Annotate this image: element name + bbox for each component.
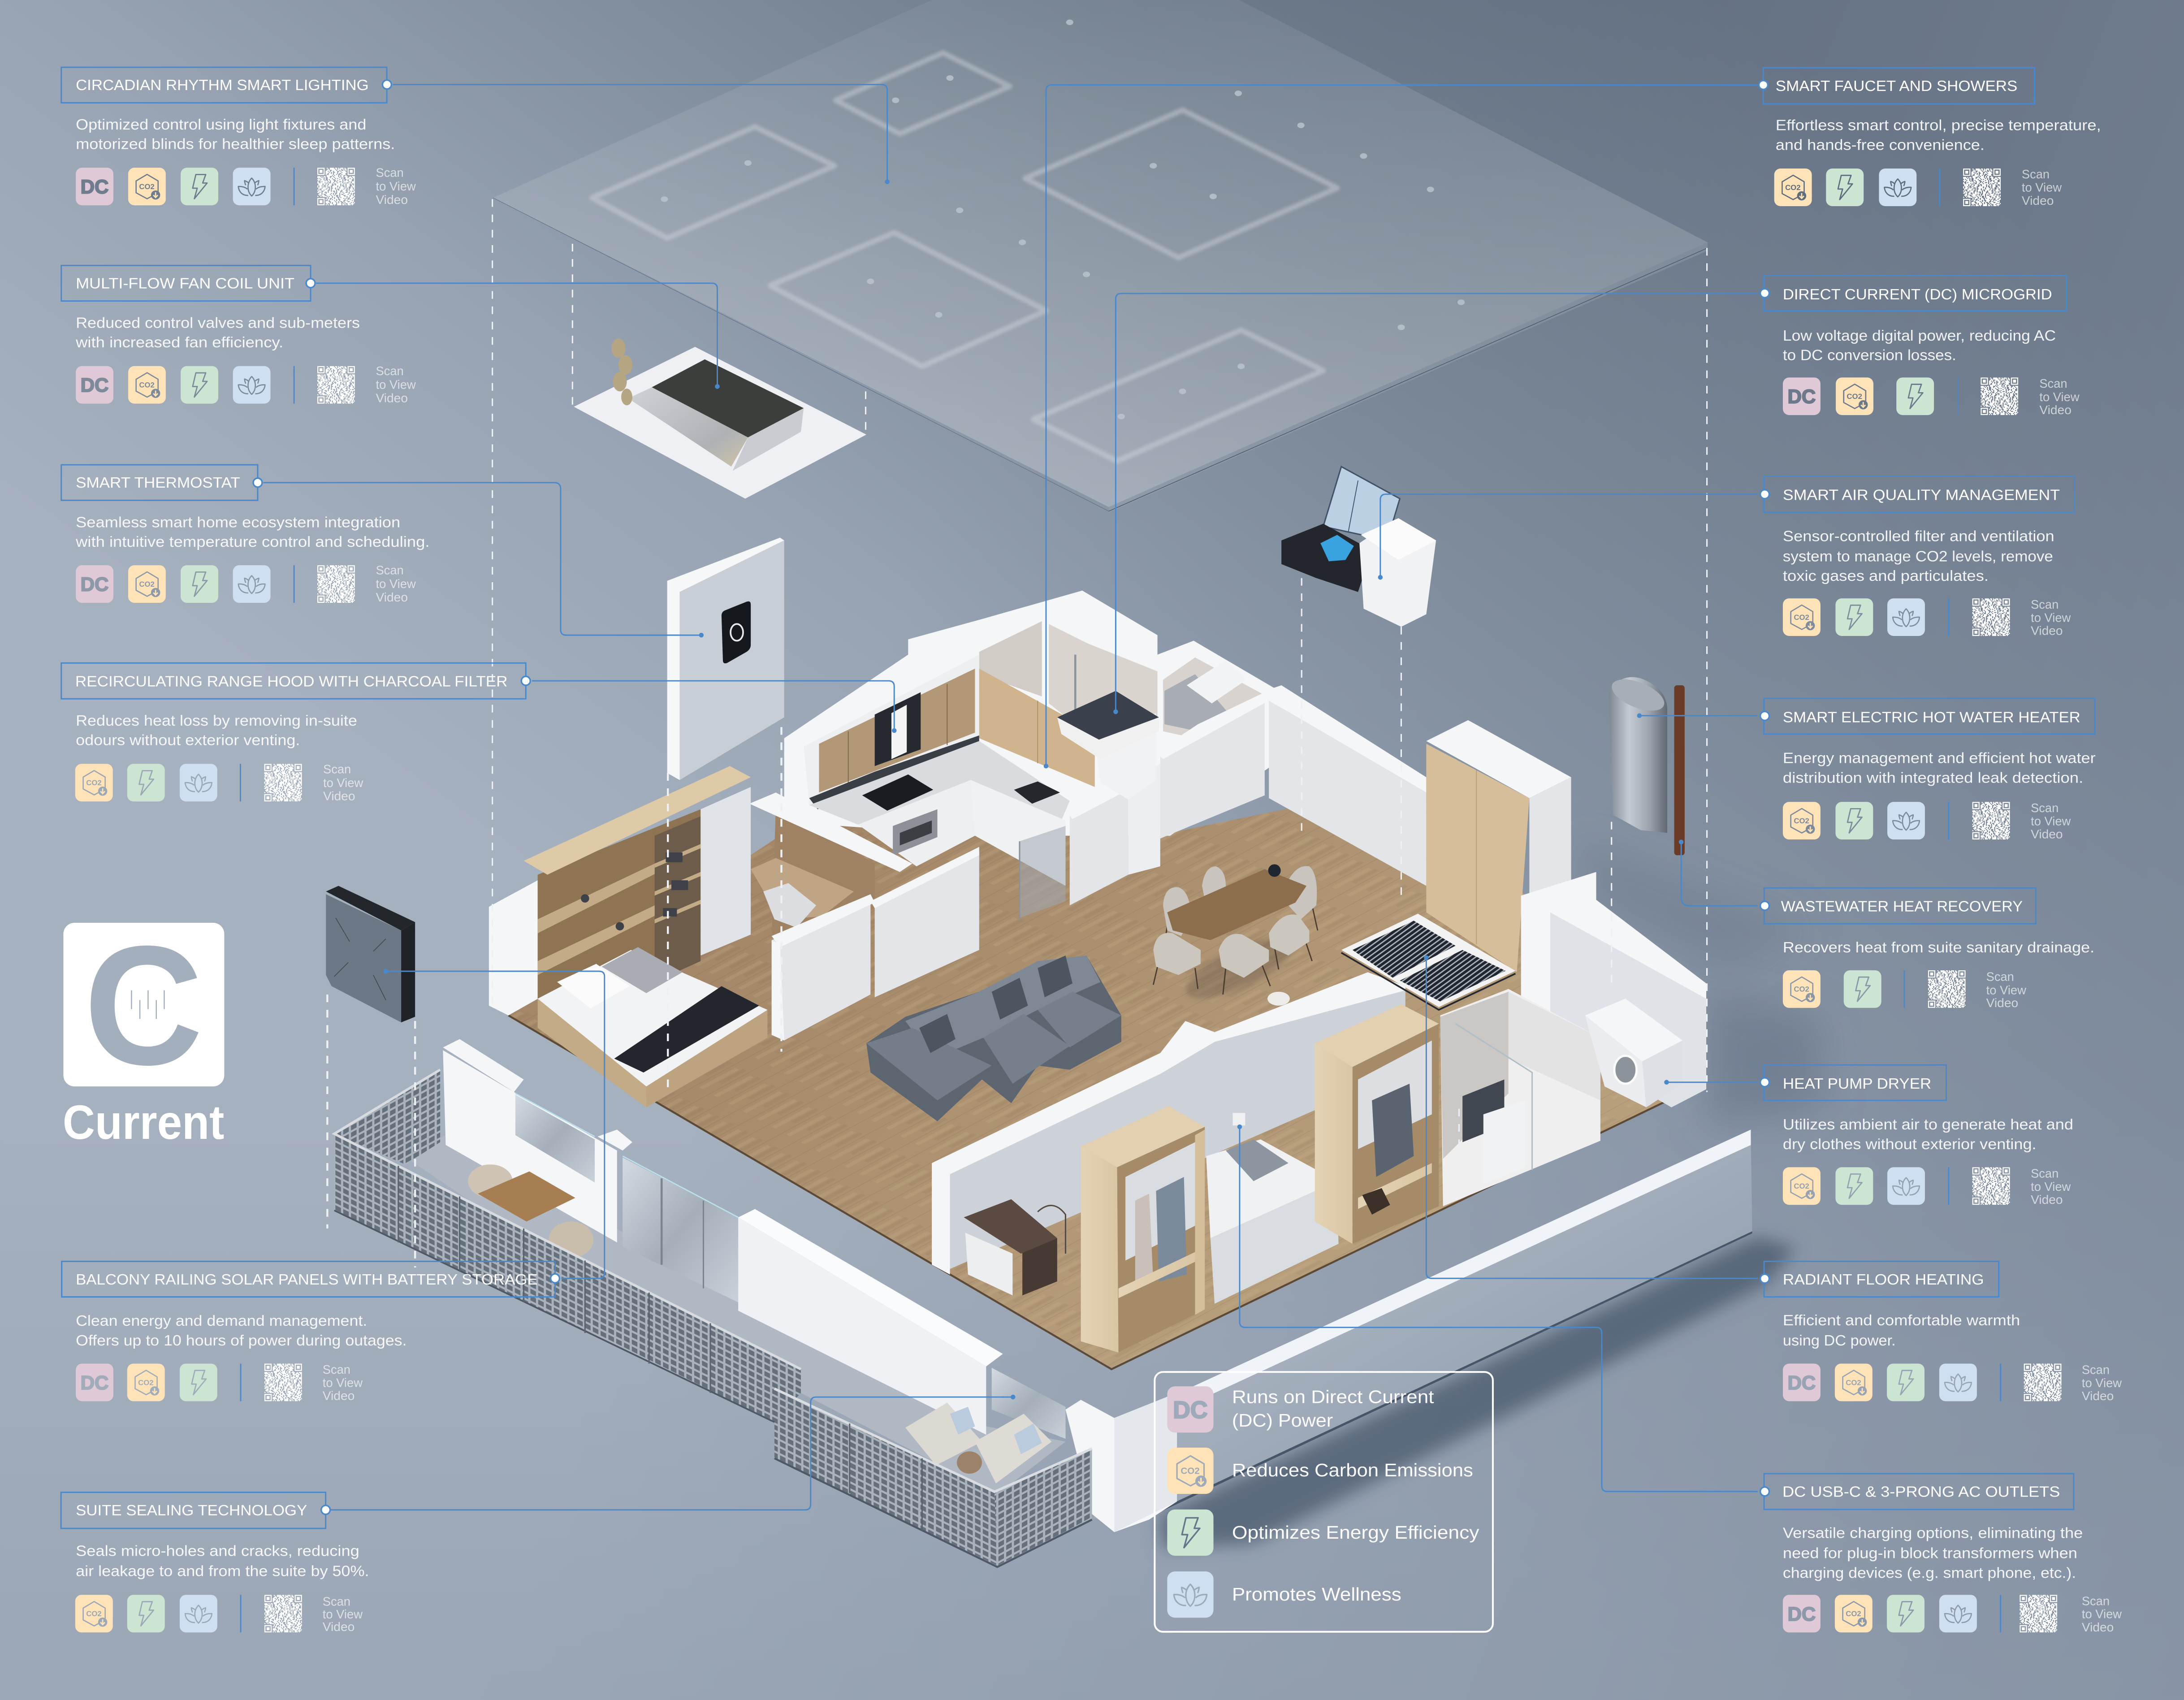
- QR code: [241, 1363, 302, 1401]
- scan label: Scan: [323, 1363, 350, 1376]
- legend: direct current: DC: [1173, 1397, 1208, 1423]
- callout: recirculating range hood: [61, 663, 530, 803]
- scan label: to View: [323, 1607, 363, 1621]
- scan label: to View: [376, 378, 416, 392]
- heading: [1759, 68, 2035, 104]
- benefit icons: CO2: [1846, 1609, 1861, 1618]
- QR code: [294, 168, 355, 205]
- scan label: Scan: [1986, 969, 2014, 983]
- tall wardrobe: [1426, 720, 1571, 972]
- headboard closet with shelves: [524, 766, 751, 1024]
- lighting rings: [592, 53, 1337, 461]
- logo tile: C: [84, 911, 203, 1101]
- description: with increased fan efficiency.: [75, 334, 283, 350]
- heading: SMART THERMOSTAT: [76, 475, 240, 491]
- heading: RECIRCULATING RANGE HOOD WITH CHARCOAL FILTER: [75, 673, 507, 690]
- description: [76, 116, 395, 152]
- benefit icons: CO2: [1794, 613, 1809, 622]
- scan label: [2031, 597, 2071, 638]
- scan label: Scan: [2031, 801, 2059, 815]
- callout: radiant floor heating: [1760, 1261, 2122, 1403]
- benefit icons: CO2: [1785, 183, 1801, 192]
- heat pump dryer: [1585, 999, 1682, 1107]
- description: [1783, 528, 2054, 584]
- east walls: [1521, 872, 1706, 1107]
- QR code: [1904, 970, 1966, 1008]
- heading: HEAT PUMP DRYER: [1783, 1076, 1931, 1092]
- scan label: Scan: [2031, 597, 2059, 611]
- heading: [62, 1261, 559, 1297]
- description: [1783, 1116, 2073, 1152]
- callout: smart faucet and showers: [1759, 68, 2101, 208]
- bed in second bedroom: [1206, 1139, 1339, 1304]
- heading: DC USB-C & 3-PRONG AC OUTLETS: [1782, 1484, 2060, 1501]
- description: [76, 1542, 369, 1579]
- scan label: Video: [323, 789, 355, 803]
- benefit icons: CO2: [139, 580, 155, 588]
- hallway glass door: [1020, 826, 1065, 919]
- callout: wastewater heat recovery: [1760, 888, 2094, 1010]
- benefit icons: CO2: [1794, 1182, 1809, 1190]
- heading: [1760, 888, 2036, 924]
- south wall: [932, 972, 1406, 1275]
- QR code: [2001, 1595, 2057, 1632]
- benefit icons: CO2: [138, 1378, 154, 1387]
- QR code: [1949, 802, 2010, 839]
- left wall stub: [489, 880, 541, 1016]
- callout: smart thermostat: [61, 465, 429, 604]
- scan label: Scan: [323, 762, 351, 776]
- description: Versatile charging options, eliminating the: [1783, 1525, 2083, 1541]
- description: system to manage CO2 levels, remove: [1783, 548, 2053, 564]
- heading: CIRCADIAN RHYTHM SMART LIGHTING: [76, 77, 369, 94]
- description: Recovers heat from suite sanitary drainage.: [1783, 939, 2094, 956]
- desk: [964, 1199, 1065, 1295]
- scan label: Video: [2082, 1620, 2114, 1634]
- scan label: Video: [323, 1389, 355, 1402]
- scan label: [1986, 969, 2026, 1010]
- radiant floor heating panel: [1341, 914, 1515, 1010]
- benefit icons: CO2: [1794, 985, 1809, 994]
- end wall block: [1065, 1393, 1177, 1532]
- outlet plate: [1233, 1113, 1245, 1125]
- scan label: Scan: [2039, 376, 2067, 390]
- balcony wall with window: [443, 1039, 738, 1302]
- scan label: [2082, 1363, 2122, 1403]
- benefit icons: CO2: [86, 779, 102, 787]
- scan label: [2031, 1166, 2071, 1207]
- QR code: [1958, 377, 2018, 415]
- heading: SUITE SEALING TECHNOLOGY: [76, 1502, 307, 1519]
- description: Clean energy and demand management.: [76, 1312, 367, 1329]
- description: charging devices (e.g. smart phone, etc.).: [1783, 1564, 2076, 1581]
- QR code: [1940, 169, 2001, 206]
- solar railing panels: [334, 1070, 1092, 1567]
- scan label: to View: [2022, 181, 2062, 195]
- icon: smart thermostat: [722, 601, 751, 663]
- scan label: [2082, 1594, 2122, 1634]
- benefit icons: CO2: [139, 381, 155, 389]
- QR code: [294, 366, 355, 404]
- benefit icons: CO2: [86, 1609, 102, 1618]
- description: using DC power.: [1783, 1332, 1896, 1349]
- floor slab and strip: [1094, 1129, 1752, 1523]
- thermostat wall panel: [667, 538, 784, 780]
- scan label: to View: [323, 776, 363, 790]
- heading: DIRECT CURRENT (DC) MICROGRID: [1783, 286, 2052, 303]
- benefit icons: DC: [1787, 1372, 1816, 1394]
- scan label: Scan: [2082, 1594, 2110, 1608]
- heading: [61, 265, 315, 301]
- benefit icons: [1783, 598, 1925, 636]
- scan label: to View: [2039, 390, 2080, 404]
- smart air quality unit: [1281, 467, 1436, 627]
- closet 1: [1081, 1106, 1205, 1353]
- scan label: [323, 1594, 363, 1634]
- description: air leakage to and from the suite by 50%.: [76, 1562, 369, 1579]
- callout: smart electric hot water heater: [1760, 698, 2096, 841]
- scan label: to View: [323, 1376, 363, 1389]
- description: Seamless smart home ecosystem integration: [76, 514, 400, 530]
- closet 2: [1315, 1004, 1439, 1244]
- scan label: Scan: [2031, 1166, 2059, 1180]
- description: toxic gases and particulates.: [1783, 567, 1989, 584]
- description: dry clothes without exterior venting.: [1783, 1136, 2037, 1152]
- scan label: Scan: [2082, 1363, 2110, 1376]
- scan label: Video: [376, 590, 408, 604]
- benefit icons: CO2: [1794, 817, 1809, 825]
- scan label: to View: [2082, 1376, 2122, 1390]
- scan label: [2022, 167, 2062, 208]
- ceiling duct vent: [1057, 691, 1159, 759]
- scan label: Video: [2031, 827, 2063, 841]
- scan label: Scan: [376, 166, 404, 180]
- long balcony wall: [738, 1209, 1065, 1439]
- benefit icons: DC: [1787, 1604, 1816, 1625]
- scan label: to View: [1986, 983, 2026, 997]
- suite model: [334, 538, 1752, 1567]
- description: motorized blinds for healthier sleep patterns.: [76, 136, 395, 152]
- balcony: [334, 1039, 1177, 1567]
- legend frame: [1155, 1372, 1493, 1632]
- connector lines: [263, 85, 1758, 1510]
- legend: carbon: CO2: [1181, 1466, 1200, 1476]
- heading: [1760, 276, 2067, 311]
- kitchen counter and base cabinets: [809, 735, 1070, 886]
- QR code: [1949, 1167, 2010, 1205]
- scan label: [2031, 801, 2071, 841]
- benefit icons: [75, 1595, 217, 1632]
- legend: direct current: [1167, 1386, 1434, 1432]
- legend: wellness: Promotes Wellness: [1232, 1584, 1401, 1605]
- description: need for plug-in block transformers when: [1783, 1544, 2077, 1561]
- benefit icons: DC: [81, 1372, 108, 1394]
- description: Efficient and comfortable warmth: [1783, 1312, 2020, 1328]
- legend: energy: Optimizes Energy Efficiency: [1232, 1522, 1479, 1543]
- scan label: Video: [376, 391, 408, 405]
- bed: [538, 947, 767, 1107]
- sofa: [866, 956, 1121, 1121]
- heading: WASTEWATER HEAT RECOVERY: [1781, 898, 2023, 915]
- callout: direct current microgrid: [1760, 276, 2080, 417]
- kitchen wall and cabinets: [804, 655, 1095, 805]
- callout: smart air quality management: [1760, 476, 2074, 638]
- heading: MULTI-FLOW FAN COIL UNIT: [76, 275, 294, 292]
- benefit icons: DC: [81, 375, 108, 396]
- description: [76, 1312, 407, 1349]
- legend: carbon: Reduces Carbon Emissions: [1232, 1460, 1473, 1480]
- scan label: to View: [2031, 611, 2071, 625]
- interior partition walls: [772, 685, 1426, 1040]
- heading: [1760, 476, 2074, 512]
- QR code: [240, 764, 302, 801]
- description: [1783, 327, 2056, 363]
- heading: [1760, 1065, 1946, 1100]
- scan label: Video: [1986, 996, 2018, 1010]
- back wall silhouette: [784, 591, 1281, 836]
- benefit icons: DC: [81, 177, 108, 198]
- heading: SMART AIR QUALITY MANAGEMENT: [1783, 487, 2060, 504]
- scan label: Video: [2082, 1389, 2114, 1403]
- dashed projection lines: [327, 199, 1707, 1267]
- benefit icons: DC: [81, 574, 108, 596]
- description: Effortless smart control, precise temperature,: [1776, 117, 2101, 134]
- scan label: to View: [2031, 814, 2071, 828]
- multi-flow fan coil unit: [574, 338, 866, 499]
- heading: [1760, 1261, 1999, 1297]
- bathroom: [1440, 989, 1600, 1206]
- description: [75, 315, 360, 350]
- scan label: Video: [2022, 194, 2054, 208]
- callout: multi-flow fan coil unit: [61, 265, 416, 405]
- bathroom rooms at rear: [979, 621, 1262, 745]
- scan label: [376, 364, 416, 405]
- scan label: Video: [2039, 403, 2072, 417]
- description: [1783, 1312, 2020, 1349]
- benefit icons: [75, 764, 217, 801]
- description: distribution with integrated leak detection.: [1783, 770, 2083, 786]
- benefit icons: [1783, 1595, 1977, 1632]
- description: Reduces heat loss by removing in-suite: [76, 712, 357, 729]
- logo: Current: [63, 911, 224, 1149]
- balcony table and chairs: [468, 1164, 1051, 1484]
- scan label: [376, 563, 416, 604]
- heading: SMART ELECTRIC HOT WATER HEATER: [1783, 709, 2080, 726]
- scan label: Video: [2031, 1193, 2063, 1207]
- benefit icons: [76, 565, 271, 603]
- description: Energy management and efficient hot water: [1783, 749, 2096, 766]
- scan label: Scan: [2022, 167, 2050, 181]
- heading: [1760, 1474, 2074, 1510]
- description: Sensor-controlled filter and ventilation: [1783, 528, 2054, 545]
- heading: SMART FAUCET AND SHOWERS: [1776, 78, 2017, 95]
- description: [75, 514, 429, 550]
- dining table and chairs: [1153, 864, 1318, 1010]
- benefit icons: DC: [1787, 386, 1816, 408]
- description: odours without exterior venting.: [76, 731, 300, 748]
- scan label: Scan: [376, 563, 404, 577]
- legend: energy: [1167, 1510, 1479, 1556]
- scan label: [323, 1363, 363, 1402]
- energy recovery wall panel: [326, 886, 415, 1022]
- legend: direct current: (DC) Power: [1232, 1410, 1333, 1431]
- scan label: to View: [2082, 1607, 2122, 1621]
- description: [76, 712, 357, 748]
- QR code: [1949, 598, 2010, 636]
- benefit icons: [1774, 169, 1916, 206]
- heading: BALCONY RAILING SOLAR PANELS WITH BATTERY STORAGE: [76, 1272, 538, 1288]
- scan label: Video: [323, 1620, 355, 1634]
- benefit icons: [76, 168, 271, 205]
- benefit icons: CO2: [139, 182, 155, 191]
- benefit icons: CO2: [1847, 392, 1862, 401]
- scan label: Video: [376, 193, 408, 207]
- scan label: Video: [2031, 624, 2063, 638]
- scan label: [2039, 376, 2080, 417]
- description: [1783, 749, 2096, 786]
- benefit icons: [76, 366, 271, 404]
- benefit icons: [1783, 802, 1925, 839]
- callout: heat pump dryer: [1760, 1065, 2073, 1207]
- smart hot water heater and wastewater pipe: [1608, 673, 1685, 855]
- recessed droplets: [661, 20, 1465, 419]
- benefit icons: [1783, 1363, 1977, 1401]
- wordmark: Current: [63, 1095, 224, 1149]
- scan label: Scan: [376, 364, 404, 378]
- description: with intuitive temperature control and scheduling.: [75, 533, 429, 550]
- description: Low voltage digital power, reducing AC: [1783, 327, 2056, 344]
- description: and hands-free convenience.: [1776, 136, 1985, 153]
- heading: [61, 1492, 330, 1528]
- benefit icons: [1783, 1167, 1925, 1205]
- study: [749, 792, 913, 936]
- description: to DC conversion losses.: [1783, 347, 1956, 363]
- callout: suite sealing technology: [61, 1492, 369, 1634]
- heading: [61, 663, 530, 699]
- description: Seals micro-holes and cracks, reducing: [76, 1542, 359, 1559]
- benefit icons: [76, 1363, 217, 1401]
- scan label: [376, 166, 416, 207]
- description: [1776, 117, 2101, 153]
- scan label: to View: [376, 179, 416, 193]
- scan label: to View: [376, 577, 416, 591]
- callout: circadian rhythm smart lighting: [61, 67, 416, 207]
- benefit icons: [1783, 970, 1881, 1008]
- legend panel: [1155, 1372, 1493, 1632]
- heading: RADIANT FLOOR HEATING: [1783, 1272, 1984, 1288]
- legend: direct current: Runs on Direct Current: [1232, 1387, 1434, 1407]
- benefit icons: [1783, 377, 1934, 415]
- description: Optimized control using light fixtures and: [76, 116, 366, 133]
- legend: carbon: [1167, 1448, 1473, 1494]
- QR code: [294, 565, 355, 603]
- ceiling plate with circadian lighting: [493, 0, 1708, 513]
- description: Offers up to 10 hours of power during outages.: [76, 1332, 407, 1349]
- QR code: [241, 1595, 302, 1632]
- heading: [1760, 698, 2095, 734]
- QR code: [2001, 1363, 2061, 1401]
- heading: [61, 67, 391, 103]
- scan label: [323, 762, 363, 803]
- description: Reduced control valves and sub-meters: [76, 315, 360, 331]
- scan label: Scan: [323, 1594, 350, 1608]
- scan label: to View: [2031, 1180, 2071, 1194]
- legend: wellness: [1167, 1571, 1401, 1618]
- callout: dc usb-c and ac outlets: [1760, 1474, 2122, 1634]
- callout: balcony railing solar panels: [62, 1261, 559, 1402]
- description: Utilizes ambient air to generate heat and: [1783, 1116, 2073, 1133]
- heading: [61, 465, 262, 500]
- benefit icons: CO2: [1846, 1378, 1861, 1387]
- wood floor: [508, 780, 1691, 1369]
- description: [1783, 1525, 2083, 1581]
